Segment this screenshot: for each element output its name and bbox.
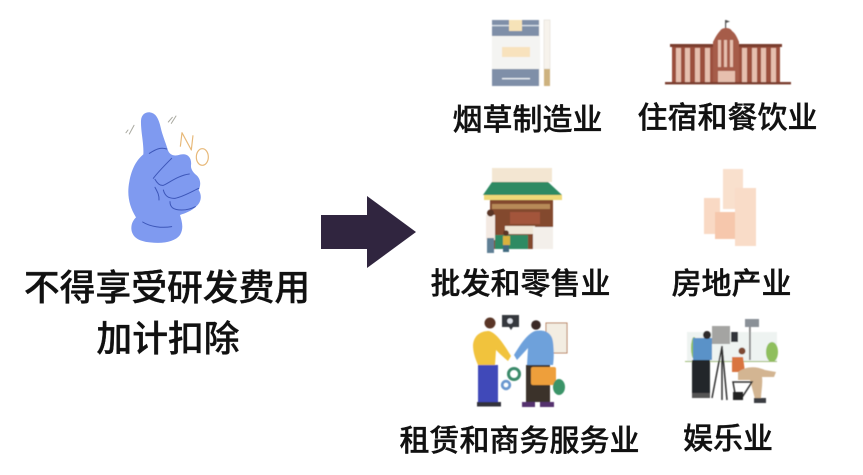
arrow [321, 196, 416, 268]
icon: real estate buildings [704, 169, 756, 246]
label: real estate: 房地产业 [672, 268, 792, 301]
icon: retail shop [483, 168, 562, 253]
heading: left statement: 加计扣除 [96, 319, 240, 359]
label: entertainment: 娱乐业 [683, 423, 773, 456]
icon: hand with raised finger saying no [126, 112, 208, 243]
heading: left statement: 不得享受研发费用 [24, 268, 310, 308]
icon: hotel building [665, 20, 791, 84]
label: leasing and business services: 租赁和商务服务业 [400, 425, 640, 458]
label: tobacco manufacturing: 烟草制造业 [452, 104, 602, 137]
heading: left statement [24, 268, 310, 359]
icon: business handshake [473, 315, 567, 407]
label: wholesale and retail: 批发和零售业 [430, 268, 610, 301]
label: hotels and catering: 住宿和餐饮业 [638, 102, 818, 135]
icon: film crew [685, 319, 778, 403]
icon: cigarette pack [492, 20, 550, 86]
